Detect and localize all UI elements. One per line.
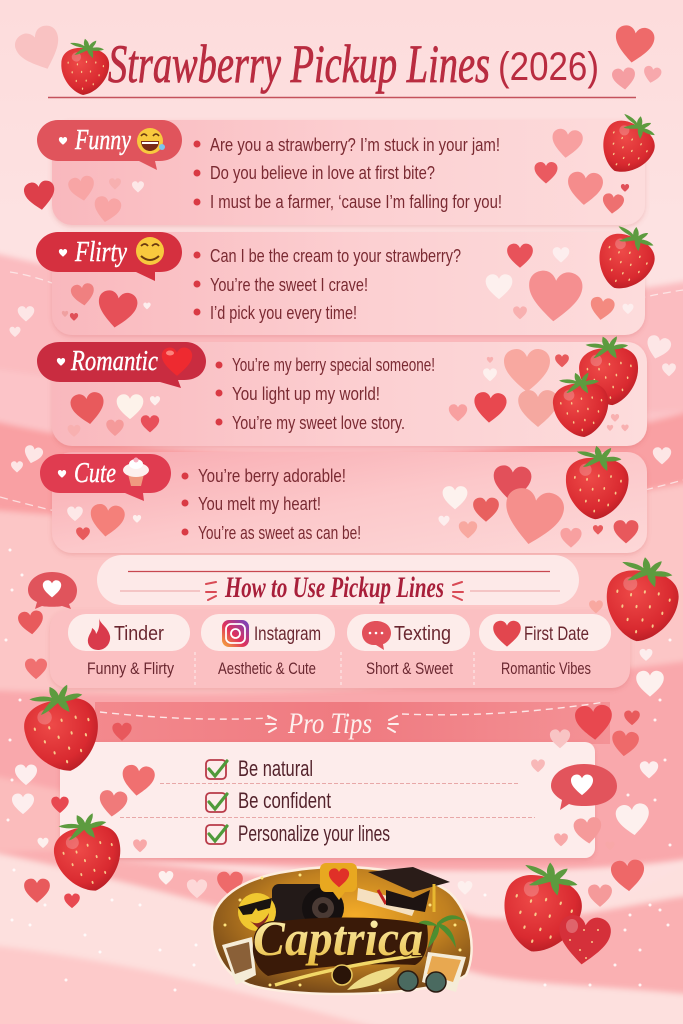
chip: texting: Texting xyxy=(394,623,451,645)
badge: funny: Funny xyxy=(74,125,131,156)
badge: flirty: Flirty xyxy=(74,237,127,268)
chip: instagram xyxy=(201,614,335,651)
panel: flirty xyxy=(36,217,664,335)
tip: personalize: Personalize your lines xyxy=(238,821,390,846)
captions: Short & Sweet xyxy=(366,659,453,678)
logo: sunglasses emoji xyxy=(238,893,276,931)
logo: swoosh plate xyxy=(253,918,428,976)
logo: feather xyxy=(347,967,400,990)
logo: palm tree xyxy=(414,915,466,957)
icon: cupcake xyxy=(123,458,149,486)
logo: camera xyxy=(272,884,344,929)
badge: romantic xyxy=(37,342,206,388)
romantic lines xyxy=(216,354,435,433)
hearts: title xyxy=(12,22,662,91)
strawberry heart xyxy=(556,914,612,967)
icon: speech bubble heart xyxy=(28,572,77,609)
hearts: romantic xyxy=(68,349,629,437)
romantic lines: You light up my world! xyxy=(232,383,380,404)
logo: gold sparkles xyxy=(225,875,460,990)
title underline xyxy=(48,96,636,98)
romantic lines: You’re my sweet love story. xyxy=(232,412,405,433)
icon: title strawberry xyxy=(59,37,111,97)
strawberries: pro tips xyxy=(17,679,591,961)
captions xyxy=(87,659,591,678)
icon: smirking emoji xyxy=(136,237,164,265)
cute lines xyxy=(182,465,361,543)
tip: be natural xyxy=(206,756,313,781)
badge: funny xyxy=(37,120,182,170)
strawberries: romantic xyxy=(550,333,642,440)
title: Strawberry Pickup Lines xyxy=(108,34,490,94)
hearts: cute xyxy=(67,465,638,549)
flirty lines: I’d pick you every time! xyxy=(210,302,357,323)
captions: Funny & Flirty xyxy=(87,659,174,678)
pro tips heading: Pro Tips xyxy=(287,707,372,740)
strawberry: cute xyxy=(564,444,630,521)
logo: heart speech xyxy=(320,863,357,900)
cute lines: You’re as sweet as can be! xyxy=(198,522,361,543)
logo: swoosh xyxy=(275,955,422,985)
title: (2026) xyxy=(498,45,599,89)
how to use heading: How to Use Pickup Lines xyxy=(224,571,444,604)
panel: funny xyxy=(23,105,665,225)
strawberry: flirty xyxy=(589,217,664,298)
chip: tinder: Tinder xyxy=(114,623,164,645)
badge: romantic: Romantic xyxy=(70,345,158,377)
logo: diploma xyxy=(357,888,417,916)
chip: texting xyxy=(347,614,470,651)
hearts: pro tips right xyxy=(458,704,658,907)
captions: Romantic Vibes xyxy=(501,659,591,678)
chip: tinder xyxy=(68,614,190,651)
panel: cute xyxy=(40,444,647,553)
chip: instagram: Instagram xyxy=(254,624,321,645)
tip: personalize xyxy=(206,821,390,846)
badge: cute: Cute xyxy=(74,457,116,489)
funny lines: Are you a strawberry? I’m stuck in your jam! xyxy=(210,134,500,155)
funny lines: Do you believe in love at first bite? xyxy=(210,162,435,183)
cute lines: You’re berry adorable! xyxy=(198,465,346,486)
badge: flirty xyxy=(36,232,182,281)
funny lines xyxy=(194,134,502,212)
logo: wordmark: Captrica xyxy=(253,910,423,966)
icon: speech bubble right xyxy=(551,764,617,810)
icon: laughing emoji xyxy=(137,128,165,154)
scattered dots xyxy=(6,550,670,990)
tip: be confident xyxy=(206,788,331,813)
logo: captrica xyxy=(212,863,472,994)
hearts: pro tips left xyxy=(12,723,243,908)
strawberry: how to use xyxy=(601,553,683,646)
chip: first date: First Date xyxy=(524,624,589,645)
hearts: how to use xyxy=(17,600,664,697)
romantic lines: You’re my berry special someone! xyxy=(232,354,435,375)
pro tips band xyxy=(95,702,610,744)
tip: be confident: Be confident xyxy=(238,788,331,813)
tip: be natural: Be natural xyxy=(238,756,313,781)
icon: red heart emoji xyxy=(162,347,192,376)
cute lines: You melt my heart! xyxy=(198,493,321,514)
logo: sunglasses xyxy=(398,971,446,992)
flirty lines xyxy=(194,245,461,323)
captions: Aesthetic & Cute xyxy=(218,659,316,678)
how to use heading xyxy=(97,555,579,605)
strawberry: funny xyxy=(592,105,665,183)
logo: aperture xyxy=(332,965,352,985)
funny lines: I must be a farmer, ‘cause I’m falling for you! xyxy=(210,191,502,212)
chip: first date xyxy=(479,614,611,651)
background dashes xyxy=(0,272,683,511)
side hearts: middle xyxy=(9,306,676,472)
hearts: flirty xyxy=(62,244,634,330)
panel: how to use xyxy=(50,610,630,688)
flirty lines: You’re the sweet I crave! xyxy=(210,274,368,295)
hearts: funny xyxy=(23,128,629,224)
badge: cute xyxy=(40,454,171,501)
flirty lines: Can I be the cream to your strawberry? xyxy=(210,245,461,266)
logo: graduation cap xyxy=(368,867,450,912)
logo: photos xyxy=(222,937,466,992)
panel: pro tips xyxy=(60,702,610,858)
panel: romantic xyxy=(37,333,647,446)
